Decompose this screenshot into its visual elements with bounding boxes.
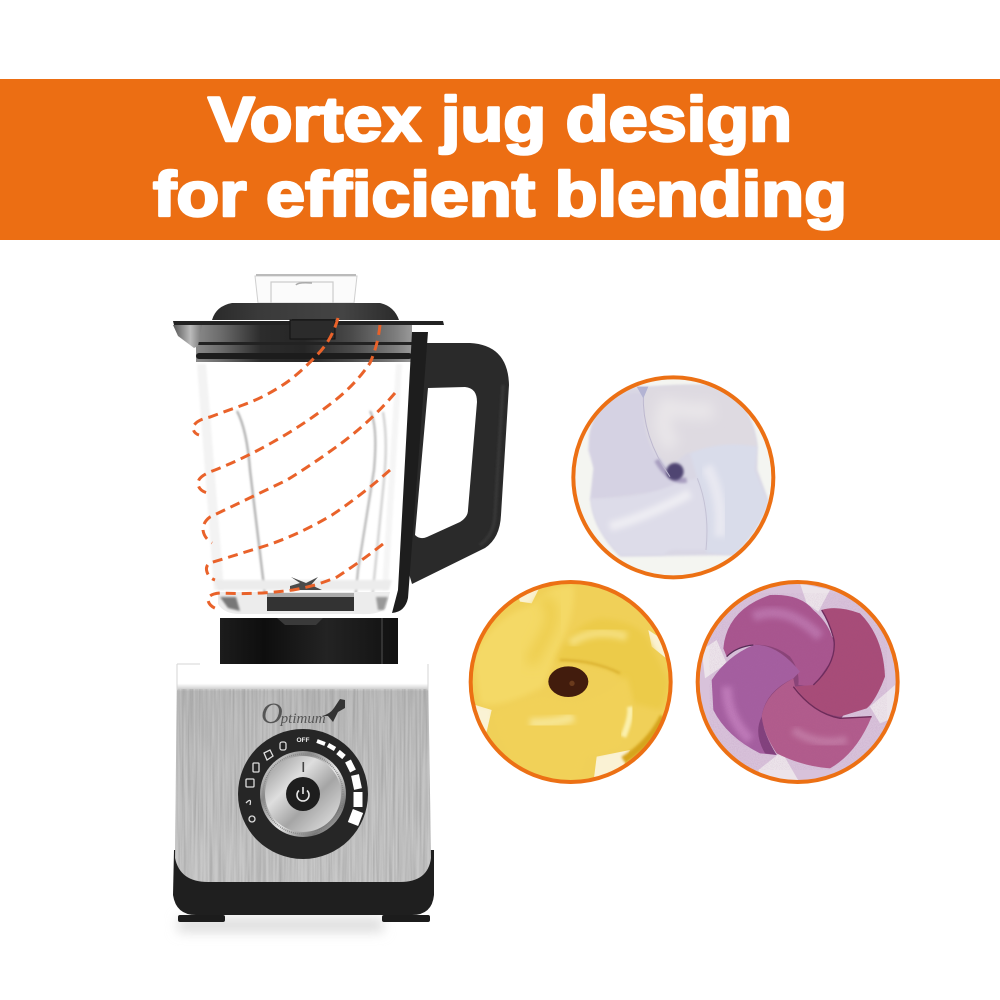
- lobe upper: [723, 595, 834, 687]
- lid tab: [290, 320, 335, 339]
- title text: for efficient blending: [153, 160, 847, 230]
- blades: [290, 577, 322, 590]
- power button: [286, 777, 320, 811]
- jug collar: [173, 325, 412, 362]
- lobe bottom: [591, 478, 707, 555]
- photo circle: pale lilac blend: [570, 373, 777, 580]
- handle spine: [392, 332, 428, 613]
- control dial: [238, 729, 368, 859]
- blender: [173, 274, 509, 932]
- blend backing: [589, 385, 768, 557]
- bottom mass: [490, 712, 606, 758]
- circle border: [573, 377, 773, 577]
- left mass: [473, 585, 574, 705]
- top right lobe: [555, 618, 668, 710]
- mode icons: [246, 742, 286, 822]
- title text: [153, 85, 847, 230]
- circle border: [471, 582, 671, 782]
- speed indicators: [317, 741, 358, 824]
- lid: [212, 303, 399, 320]
- photo circle: yellow blend: [467, 577, 677, 787]
- dial ring: [260, 751, 346, 837]
- logo: Optimum: [261, 697, 326, 730]
- knob cap on lid: [255, 274, 357, 303]
- jug handle: [405, 340, 509, 584]
- vortex dashed lines: [193, 318, 395, 610]
- glass jar: [196, 362, 403, 614]
- title text: Vortex jug design: [208, 85, 792, 155]
- lobe right: [793, 608, 885, 717]
- circle border: [698, 582, 898, 782]
- lobe right: [702, 446, 768, 542]
- pale corners: [476, 590, 666, 777]
- jar base: [218, 592, 390, 614]
- title banner: [0, 79, 1000, 240]
- base feet: [178, 915, 430, 922]
- motor neck: [220, 618, 398, 664]
- lobe left: [588, 436, 596, 497]
- lid flange: [173, 319, 444, 325]
- brushed steel front plate: [175, 664, 433, 884]
- OFF label: OFF: [296, 737, 310, 744]
- lobe top right: [672, 384, 692, 386]
- vortex hole: [548, 666, 588, 697]
- base black lower: [173, 850, 434, 915]
- lobe left: [712, 645, 800, 755]
- photo circle: berry blend: [693, 577, 903, 787]
- swirl backing: [755, 637, 844, 728]
- lobe lower: [762, 678, 872, 768]
- glass ridges: [702, 583, 897, 783]
- floor shadow: [178, 918, 383, 932]
- vortex hole: [666, 463, 684, 480]
